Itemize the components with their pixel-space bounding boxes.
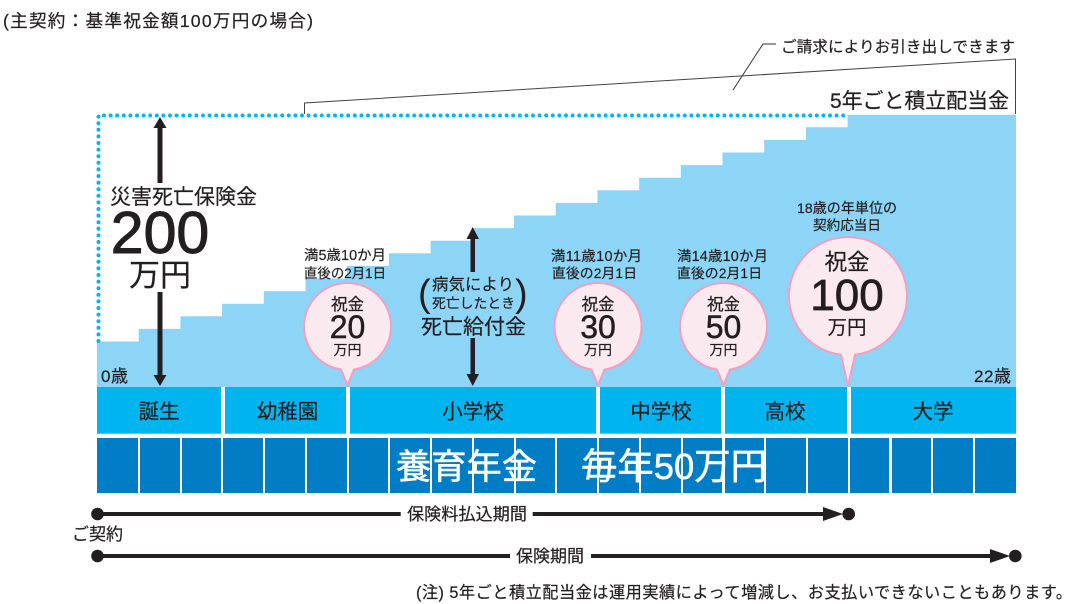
arrow: death payout up (466, 227, 479, 272)
callout: withdrawal note with leader line: ご請求によりお引き出しできます (781, 38, 1015, 56)
text block: death payout: ( (418, 273, 431, 315)
text block: death payout: ) (515, 273, 528, 315)
band: annual annuity payments (97, 438, 1016, 493)
label: age 22: 22歳 (974, 367, 1011, 386)
band: life stages: 高校 (764, 400, 806, 424)
arrow: accidental death benefit down (154, 292, 166, 386)
bracket: dividend range (304, 59, 1016, 114)
text block: death payout: 死亡したとき (432, 296, 515, 311)
dotted outline: accidental death benefit level (98, 116, 847, 341)
callout bubble: 500,000 yen (680, 283, 767, 385)
band: life stages: 中学校 (630, 400, 692, 424)
band: life stages: 幼稚園 (257, 400, 318, 424)
label: contract start: ご契約 (72, 525, 123, 544)
callout bubble: 300,000 yen: 祝金 (582, 295, 614, 314)
callout bubble: 200,000 yen (304, 283, 391, 385)
text block: accidental death benefit 200: 万円 (129, 258, 191, 293)
arrow: death payout down (466, 338, 479, 386)
date label: 14 years 10 months: 直後の2月1日 (677, 266, 762, 281)
band: life stages: 大学 (912, 400, 954, 424)
band: life stages (97, 387, 1016, 434)
timeline: premium payment period: 保険料払込期間 (407, 505, 527, 524)
timeline: coverage period: 保険期間 (516, 547, 584, 566)
text block: death payout: 死亡給付金 (421, 316, 526, 339)
callout bubble: 1,000,000 yen (789, 237, 907, 386)
heading: plan condition note: (主契約：基準祝金額100万円の場合) (3, 11, 313, 31)
callout bubble: 300,000 yen (554, 283, 641, 385)
chart: staircase of accumulated benefit (97, 115, 1016, 387)
callout bubble: 500,000 yen: 万円 (710, 342, 738, 358)
date label: 11 years 10 months: 満11歳10か月 (551, 248, 642, 265)
date label: age 18 anniversary: 18歳の年単位の (797, 200, 897, 216)
text block: death payout: 病気により (432, 276, 514, 294)
date label: 11 years 10 months: 直後の2月1日 (552, 266, 637, 281)
band: life stages: 小学校 (442, 400, 504, 424)
callout bubble: 300,000 yen: 30 (580, 309, 616, 345)
label: age 0: 0歳 (101, 367, 128, 386)
text block: death payout (418, 273, 528, 339)
callout bubble: 1,000,000 yen: 100 (810, 271, 884, 320)
text block: accidental death benefit 200: 200 (111, 200, 209, 266)
date label: 14 years 10 months (677, 248, 768, 281)
callout bubble: 200,000 yen: 万円 (334, 342, 362, 358)
footnote: (注) 5年ごと積立配当金は運用実績によって増減し、お支払いできないこともあります。 (416, 584, 1070, 602)
band: annual annuity payments: 毎年50万円 (581, 446, 767, 487)
timeline: premium payment period (91, 505, 855, 524)
callout bubble: 300,000 yen: 万円 (584, 342, 612, 358)
callout bubble: 200,000 yen: 20 (330, 309, 365, 345)
text block: accidental death benefit 200: 災害死亡保険金 (110, 186, 257, 209)
date label: 5 years 10 months: 満5歳10か月 (304, 247, 386, 264)
label: dividend every five years: 5年ごと積立配当金 (830, 90, 1009, 113)
callout: withdrawal note with leader line (733, 38, 1015, 90)
callout bubble: 1,000,000 yen: 祝金 (824, 250, 870, 275)
callout bubble: 1,000,000 yen: 万円 (827, 317, 867, 339)
date label: age 18 anniversary (797, 200, 897, 233)
callout bubble: 500,000 yen: 50 (706, 309, 741, 345)
date label: age 18 anniversary: 契約応当日 (813, 218, 881, 233)
band: annual annuity payments: 養育年金 (396, 448, 537, 487)
callout bubble: 200,000 yen: 祝金 (331, 295, 364, 314)
callout bubble: 500,000 yen: 祝金 (707, 295, 740, 314)
date label: 11 years 10 months (551, 248, 642, 281)
date label: 14 years 10 months: 満14歳10か月 (677, 248, 768, 265)
text block: accidental death benefit 200 (110, 186, 257, 293)
date label: 5 years 10 months (304, 247, 386, 281)
date label: 5 years 10 months: 直後の2月1日 (304, 266, 386, 281)
band: life stages: 誕生 (138, 400, 180, 424)
timeline: coverage period (91, 547, 1022, 566)
arrow: accidental death benefit up (154, 117, 166, 183)
